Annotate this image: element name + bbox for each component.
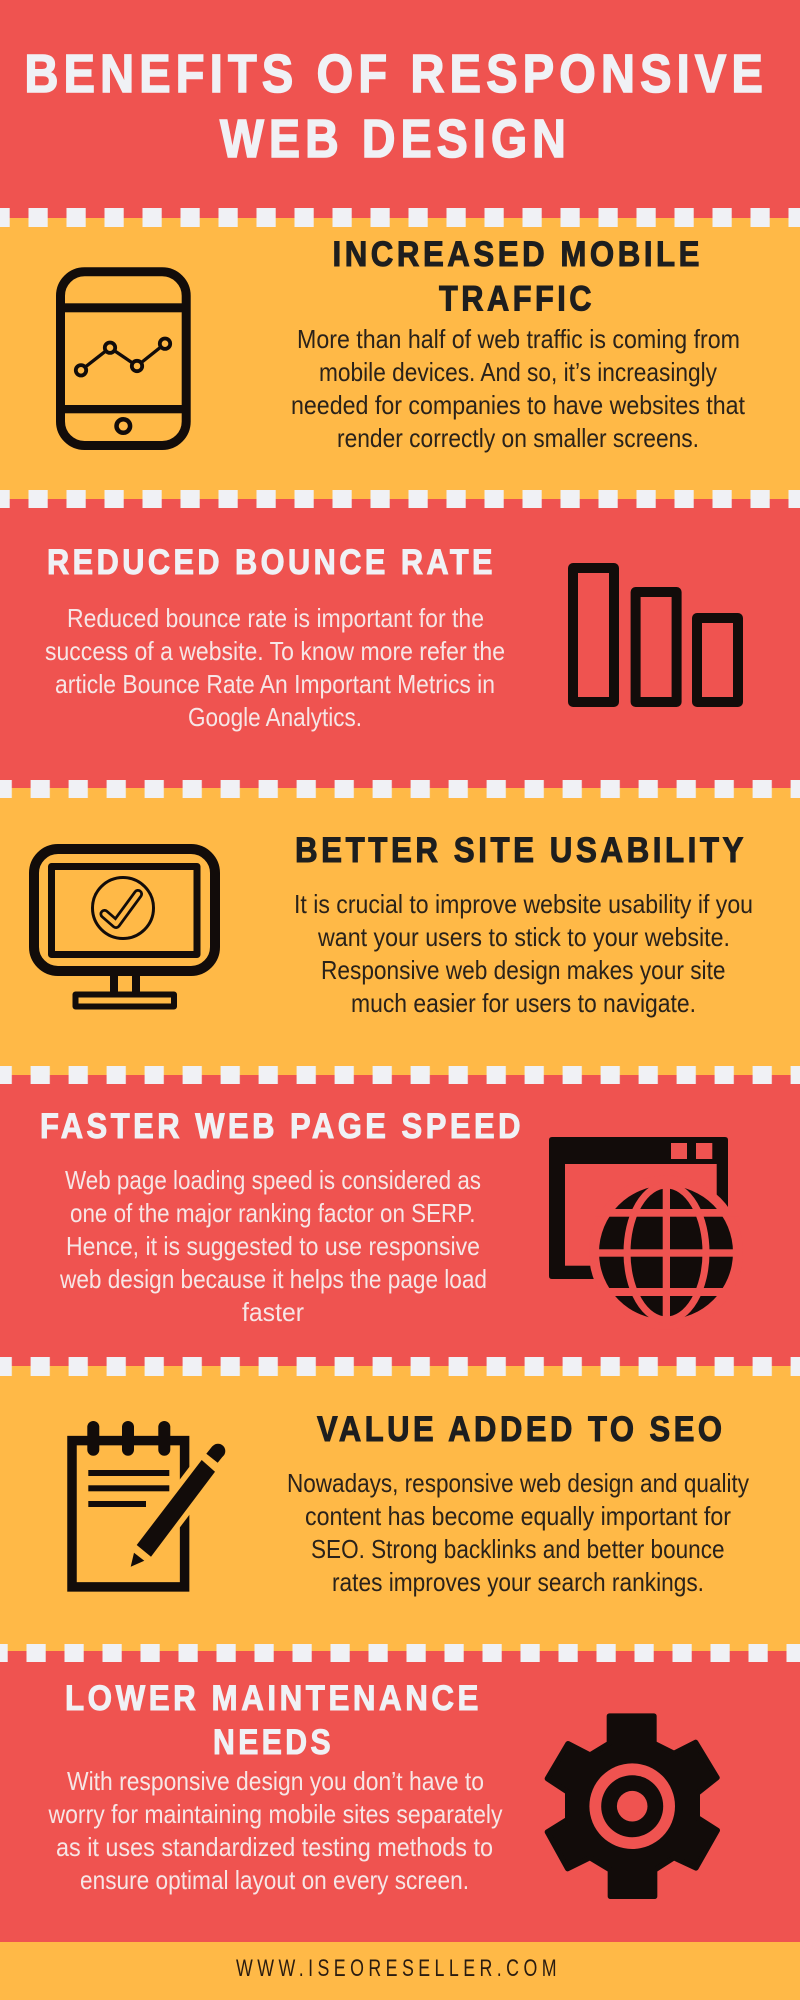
icon: smartphone with line chart [60,272,187,446]
text block: page speed: one of the major ranking factor on SERP. [70,1198,476,1228]
heading: value added to SEO: VALUE ADDED TO SEO [317,1409,726,1449]
panel: lower maintenance needs [48,1678,717,1896]
text block: mobile traffic: More than half of web traffic is coming from [297,324,740,354]
text block: mobile traffic: render correctly on smaller screens. [337,423,699,453]
text block: page speed: faster [242,1297,304,1327]
panel: better site usability [34,830,753,1018]
text block: usability: much easier for users to navigate. [351,988,696,1018]
title: WEB DESIGN [220,109,571,169]
footer: website address: WWW.ISEORESELLER.COM [236,1955,561,1982]
text block: mobile traffic: needed for companies to have websites that [291,390,746,420]
text block: page speed: Hence, it is suggested to use responsive [66,1231,480,1261]
text block: maintenance: With responsive design you don’t have to [67,1766,484,1796]
text block: usability [294,889,753,1018]
text block: maintenance: as it uses standardized testing methods to [56,1832,493,1862]
text block: usability: Responsive web design makes your site [321,955,726,985]
heading: faster web page speed: FASTER WEB PAGE SPEED [40,1106,524,1146]
text block: page speed: Web page loading speed is considered as [65,1165,481,1195]
panel: value added to SEO [72,1409,749,1597]
text block: mobile traffic [291,324,746,453]
heading: increased mobile traffic: TRAFFIC [439,278,595,318]
icon: descending bars [573,568,738,702]
text block: usability: want your users to stick to your website. [317,922,730,952]
text block: page speed [59,1165,487,1327]
icon: monitor with check mark [34,849,215,1006]
text block: bounce rate: success of a website. To know more refer the [45,636,505,666]
panel: increased mobile traffic [60,234,746,453]
text block: maintenance: worry for maintaining mobile sites separately [48,1799,502,1829]
text block: bounce rate [45,603,505,732]
text block: page speed: web design because it helps the page load [59,1264,487,1294]
text block: maintenance: ensure optimal layout on every screen. [80,1865,469,1895]
text block: bounce rate: Reduced bounce rate is important for the [67,603,484,633]
text block: bounce rate: Google Analytics. [188,702,362,732]
text block: SEO: SEO. Strong backlinks and better bounce [311,1534,724,1564]
heading: better site usability: BETTER SITE USABILITY [295,830,747,870]
text block: usability: It is crucial to improve website usability if you [294,889,753,919]
heading: lower maintenance needs [65,1678,482,1762]
title [24,44,768,169]
icon: gear [547,1716,717,1896]
panel: faster web page speed [40,1106,743,1330]
text block: SEO: rates improves your search rankings. [332,1567,704,1597]
icon: browser window with globe [549,1137,743,1330]
text block: bounce rate: article Bounce Rate An Important Metrics in [55,669,495,699]
text block: SEO [287,1468,749,1597]
heading: lower maintenance needs: LOWER MAINTENANCE [65,1678,482,1718]
text block: SEO: content has become equally important for [305,1501,731,1531]
text block: maintenance [48,1766,502,1895]
panel: reduced bounce rate [45,542,738,732]
heading: reduced bounce rate: REDUCED BOUNCE RATE [47,542,496,582]
icon: notepad and pencil [72,1427,225,1587]
heading: lower maintenance needs: NEEDS [213,1722,334,1762]
heading: increased mobile traffic: INCREASED MOBILE [332,234,703,274]
text block: mobile traffic: mobile devices. And so, it’s increasingly [319,357,717,387]
heading: increased mobile traffic [332,234,703,318]
